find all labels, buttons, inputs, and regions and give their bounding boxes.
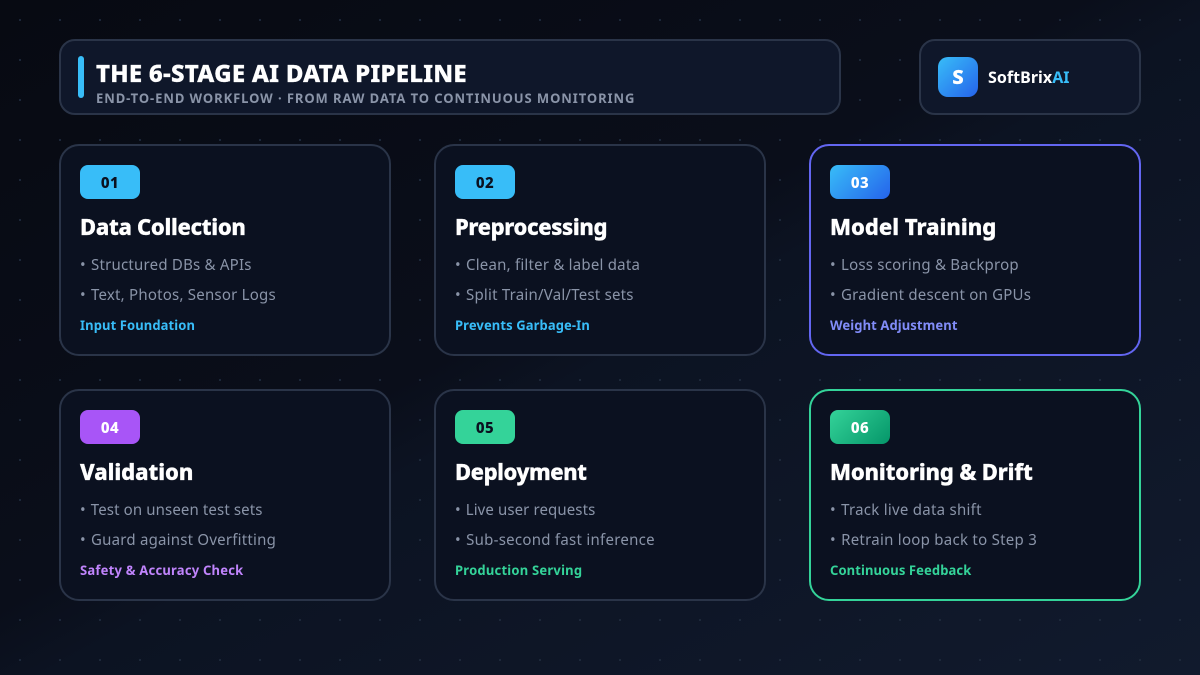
logo panel	[919, 39, 1141, 115]
card: Monitoring & Drift	[809, 389, 1141, 601]
badge 05	[455, 410, 515, 444]
tag: Production Serving	[455, 561, 582, 579]
bullet: • Retrain loop back to Step 3	[830, 530, 1037, 550]
bullet: • Test on unseen test sets	[80, 500, 263, 520]
badge 02	[455, 165, 515, 199]
subtitle: END-TO-END WORKFLOW · FROM RAW DATA TO CONTINUOUS MONITORING	[96, 89, 635, 107]
heading: Monitoring & Drift	[830, 457, 1033, 487]
badge 03: 03	[851, 173, 869, 193]
heading: Model Training	[830, 212, 996, 242]
card: Preprocessing	[434, 144, 766, 356]
heading: Validation	[80, 457, 193, 487]
badge 01	[80, 165, 140, 199]
heading: Data Collection	[80, 212, 246, 242]
badge 06	[830, 410, 890, 444]
bullet: • Clean, filter & label data	[455, 255, 640, 275]
badge 04	[80, 410, 140, 444]
tag: Input Foundation	[80, 316, 195, 334]
logo text: SoftBrixAI	[988, 66, 1070, 88]
card: Deployment	[434, 389, 766, 601]
logo icon	[938, 57, 978, 97]
logo icon: S	[952, 63, 964, 90]
bullet: • Split Train/Val/Test sets	[455, 285, 634, 305]
tag: Weight Adjustment	[830, 316, 958, 334]
header panel	[59, 39, 841, 115]
bullet: • Sub-second fast inference	[455, 530, 655, 550]
bullet: • Live user requests	[455, 500, 595, 520]
badge 01: 01	[101, 173, 119, 193]
bullet: • Text, Photos, Sensor Logs	[80, 285, 276, 305]
bullet: • Loss scoring & Backprop	[830, 255, 1019, 275]
card: Validation	[59, 389, 391, 601]
badge 06: 06	[851, 418, 869, 438]
card: Data Collection	[59, 144, 391, 356]
heading: Preprocessing	[455, 212, 607, 242]
bullet: • Gradient descent on GPUs	[830, 285, 1031, 305]
card: Model Training	[809, 144, 1141, 356]
bullet: • Track live data shift	[830, 500, 982, 520]
title: THE 6-STAGE AI DATA PIPELINE	[96, 57, 467, 90]
bullet: • Guard against Overfitting	[80, 530, 276, 550]
badge 03	[830, 165, 890, 199]
badge 02: 02	[476, 173, 494, 193]
accent bar	[78, 56, 84, 98]
tag: Safety & Accuracy Check	[80, 561, 243, 579]
badge 04: 04	[101, 418, 119, 438]
tag: Prevents Garbage-In	[455, 316, 590, 334]
heading: Deployment	[455, 457, 587, 487]
tag: Continuous Feedback	[830, 561, 971, 579]
bullet: • Structured DBs & APIs	[80, 255, 252, 275]
badge 05: 05	[476, 418, 494, 438]
